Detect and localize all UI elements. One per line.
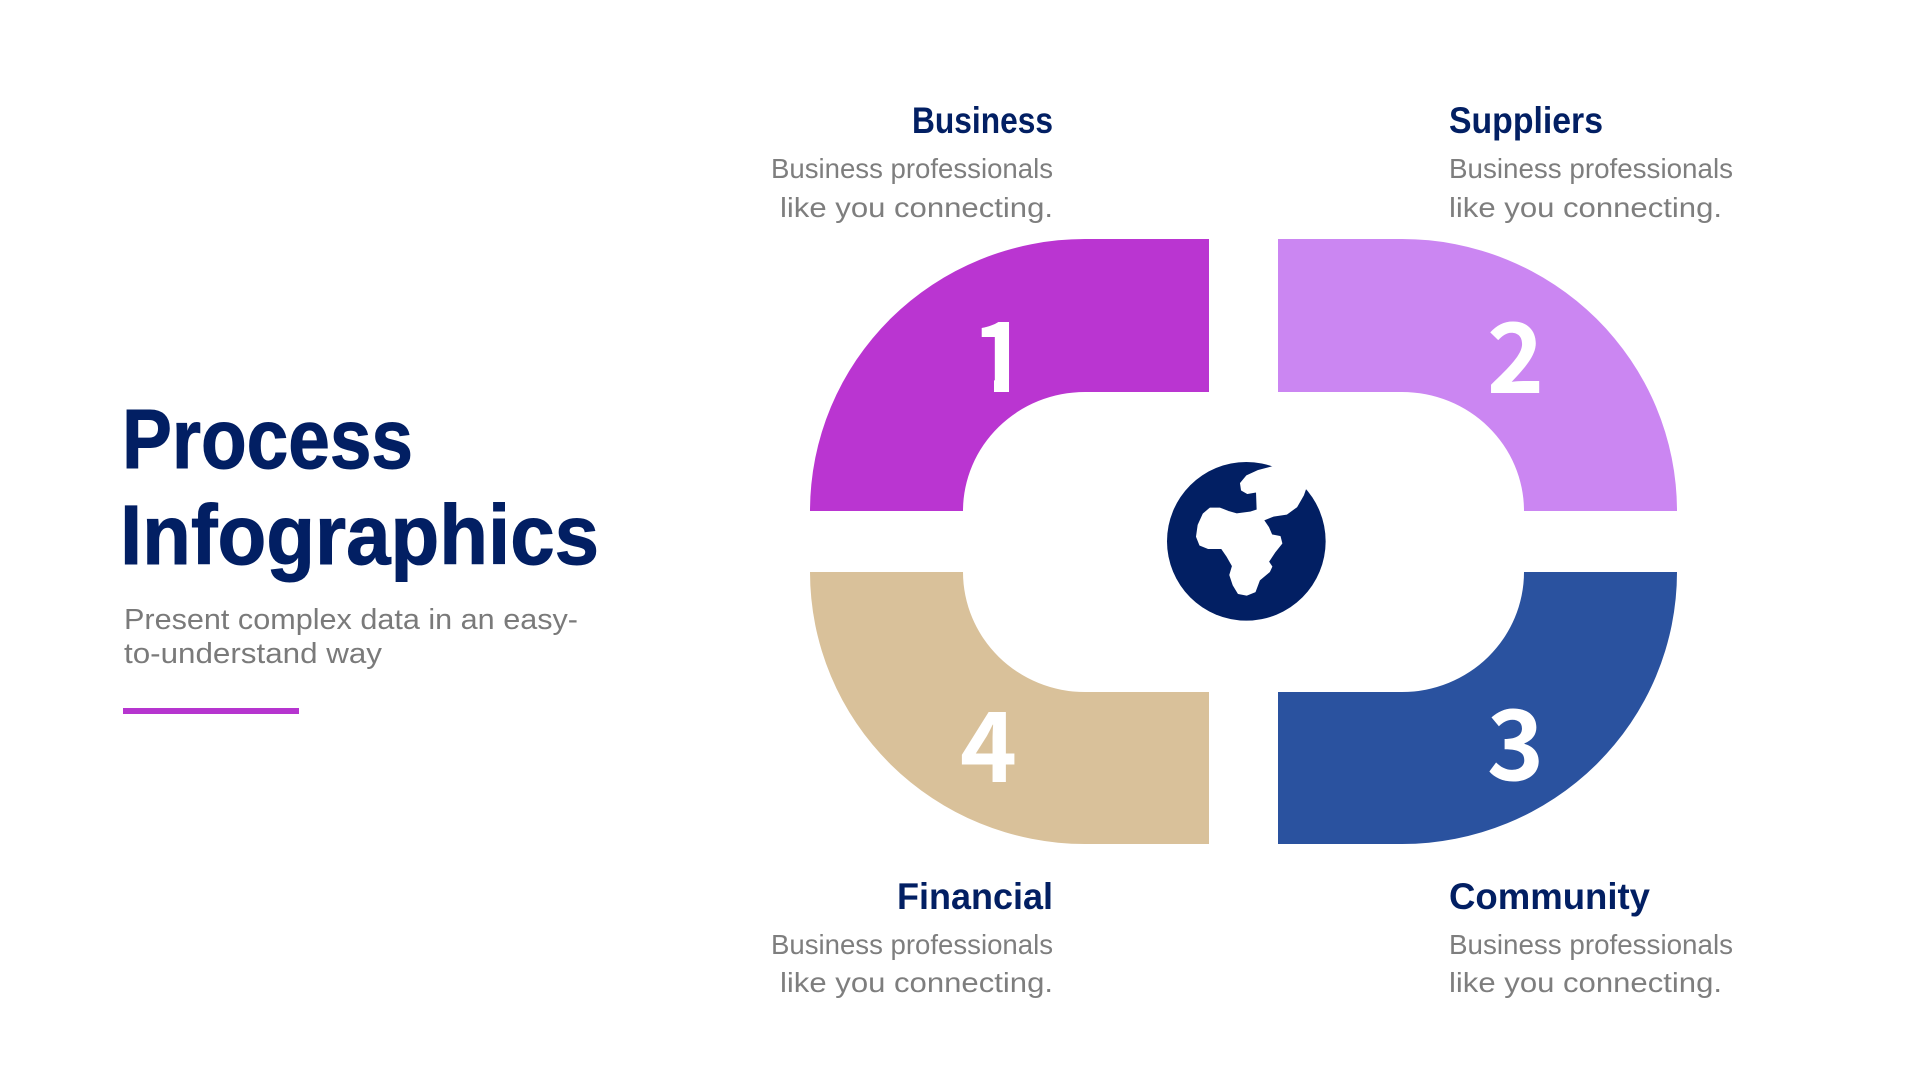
segment 2: light purple	[1278, 239, 1677, 511]
subtitle: to-understand way	[124, 638, 383, 670]
segment 1: purple	[810, 239, 1209, 511]
label: Financial	[771, 876, 1053, 998]
label: Financial: like you connecting.	[780, 967, 1053, 998]
label: Business: Business professionals	[771, 153, 1053, 184]
label: Business: Business	[912, 100, 1053, 141]
icon: globe	[1167, 462, 1326, 621]
label: Suppliers	[1449, 100, 1733, 223]
label: Suppliers: Suppliers	[1449, 100, 1603, 141]
label: Community	[1449, 876, 1733, 998]
title: Infographics	[120, 488, 599, 582]
accent underline	[123, 708, 299, 714]
subtitle	[124, 604, 578, 670]
label: Financial: Financial	[897, 876, 1053, 917]
title	[120, 392, 599, 582]
label: Suppliers: like you connecting.	[1449, 192, 1722, 223]
number 4: 4	[960, 669, 1017, 810]
segment 4: tan	[810, 572, 1209, 844]
label: Financial: Business professionals	[771, 929, 1053, 960]
segment 3: blue	[1278, 572, 1677, 844]
title: Process	[122, 392, 413, 486]
number 3: 3	[1487, 667, 1544, 808]
label: Business: like you connecting.	[780, 192, 1053, 223]
label: Community: like you connecting.	[1449, 967, 1722, 998]
label: Business	[771, 100, 1053, 223]
label: Community: Business professionals	[1449, 929, 1733, 960]
label: Community: Community	[1449, 876, 1650, 917]
number 2: 2	[1487, 280, 1544, 421]
number 1: 1	[971, 279, 1029, 420]
label: Suppliers: Business professionals	[1449, 153, 1733, 184]
subtitle: Present complex data in an easy-	[124, 604, 578, 636]
